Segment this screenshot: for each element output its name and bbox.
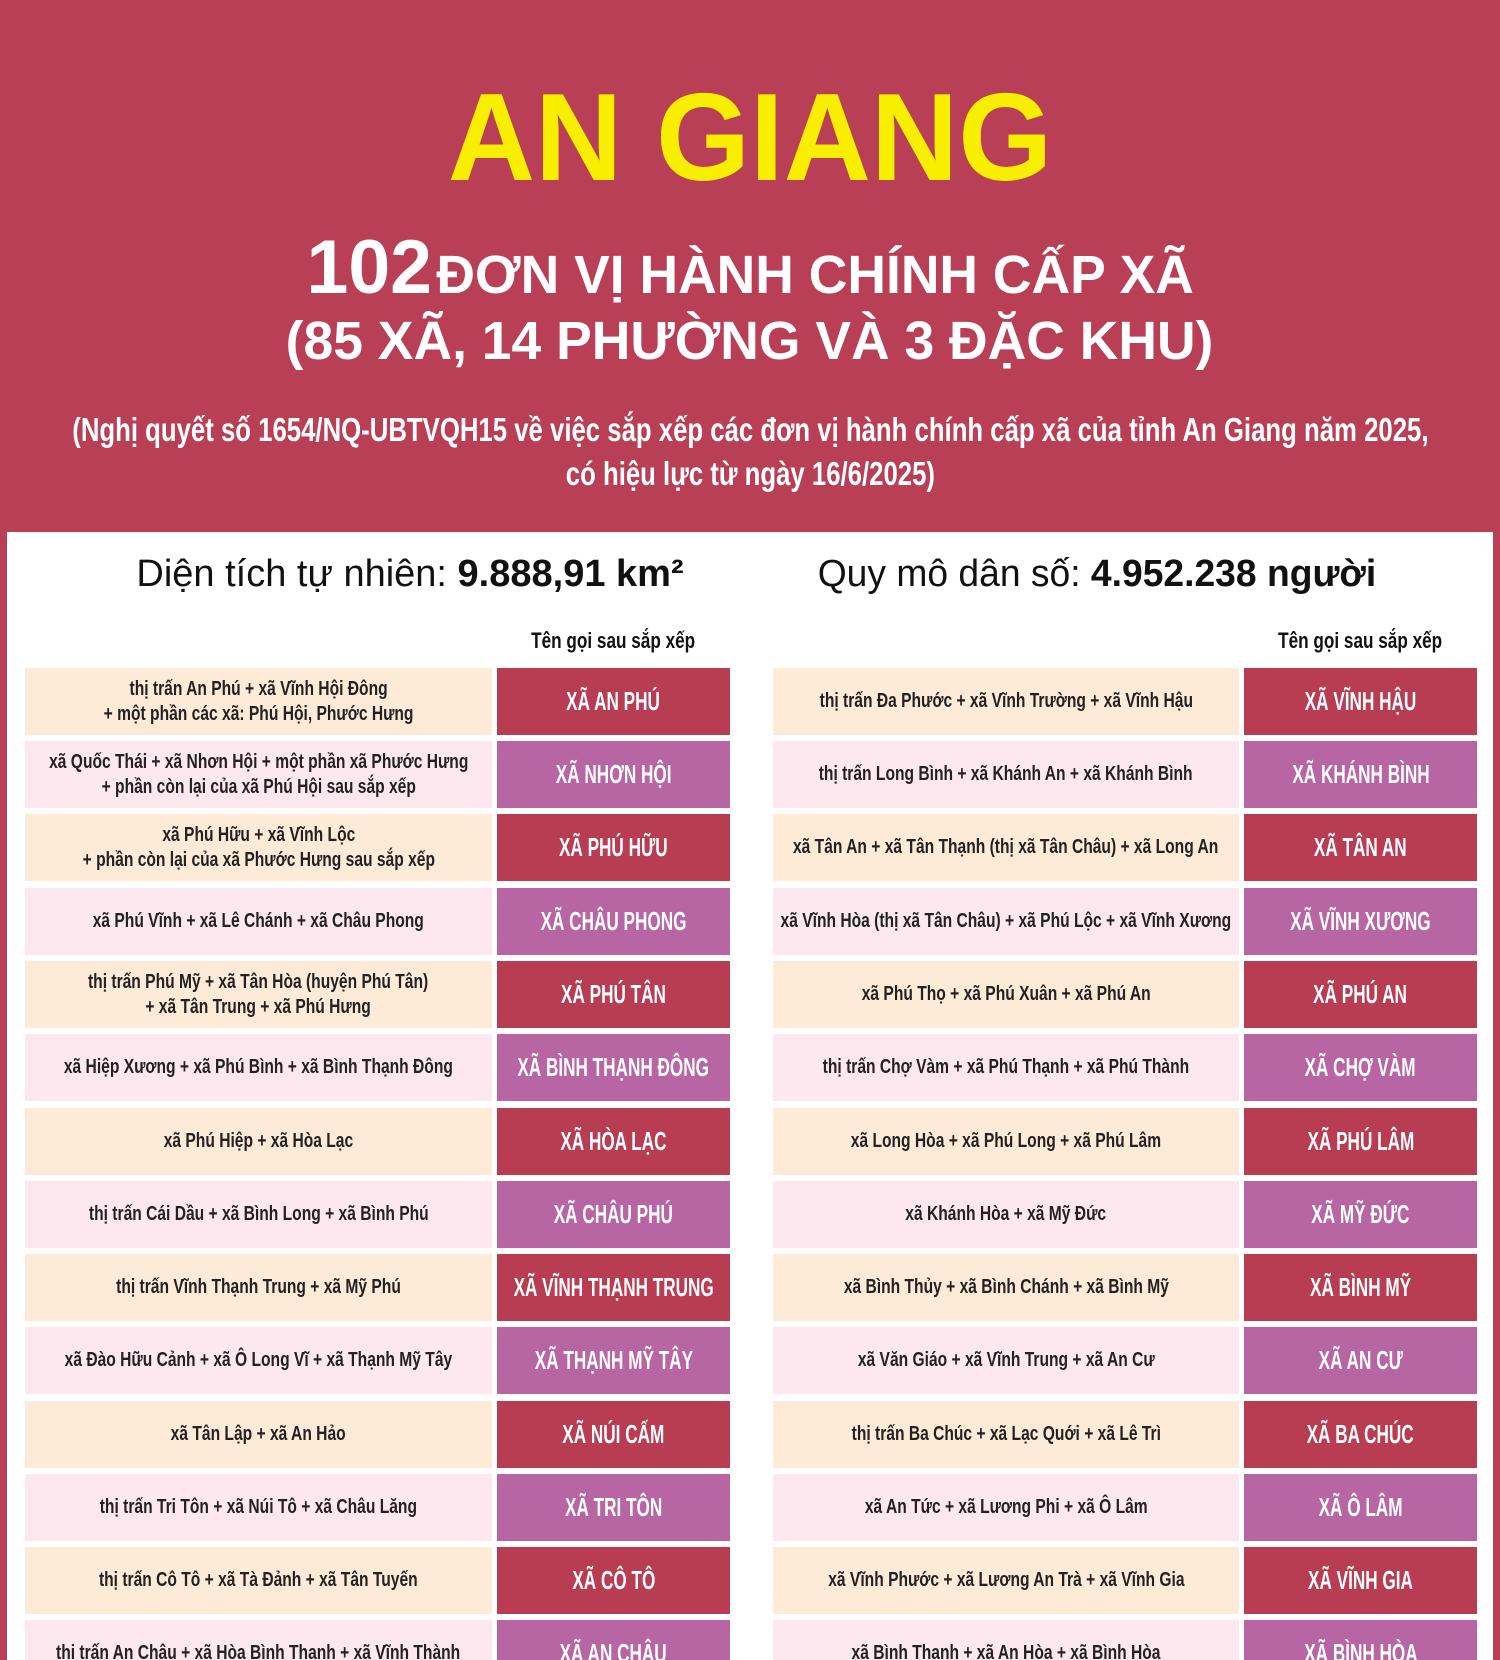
table left: xã Đào Hữu Cảnh + xã Ô Long Vĩ + xã Thạnh Mỹ Tây <box>65 1349 452 1371</box>
table left: + phần còn lại của xã Phước Hưng sau sắp xếp <box>82 848 435 870</box>
table left: XÃ PHÚ HỮU <box>559 832 668 862</box>
table right: XÃ CHỢ VÀM <box>1305 1052 1416 1082</box>
white panel <box>7 532 1493 1660</box>
table right: XÃ AN CƯ <box>1318 1345 1403 1375</box>
table right: xã Long Hòa + xã Phú Long + xã Phú Lâm <box>851 1130 1161 1152</box>
table left: + một phần các xã: Phú Hội, Phước Hưng <box>104 702 413 724</box>
resolution note: có hiệu lực từ ngày 16/6/2025) <box>565 455 935 492</box>
title: AN GIANG <box>448 69 1052 207</box>
subtitle line 1: 102 ĐƠN VỊ HÀNH CHÍNH CẤP XÃ <box>306 225 1194 310</box>
table right: XÃ PHÚ AN <box>1314 979 1407 1009</box>
table left: xã Quốc Thái + xã Nhơn Hội + một phần xã Phước Hưng <box>49 750 468 772</box>
table left: thị trấn Tri Tôn + xã Núi Tô + xã Châu Lăng <box>100 1496 417 1518</box>
table right: thị trấn Ba Chúc + xã Lạc Quới + xã Lê Trì <box>851 1423 1161 1445</box>
resolution note: (Nghị quyết số 1654/NQ-UBTVQH15 về việc sắp xếp các đơn vị hành chính cấp xã của tỉnh An Giang năm 2025, <box>72 411 1428 448</box>
table left: XÃ NÚI CẤM <box>562 1419 665 1449</box>
table left: thị trấn Cái Dầu + xã Bình Long + xã Bình Phú <box>89 1203 428 1225</box>
table right: XÃ MỸ ĐỨC <box>1311 1199 1410 1229</box>
table left: XÃ VĨNH THẠNH TRUNG <box>513 1272 714 1302</box>
subtitle line 2: (85 XÃ, 14 PHƯỜNG VÀ 3 ĐẶC KHU) <box>286 311 1214 371</box>
table right: XÃ VĨNH XƯƠNG <box>1290 906 1431 936</box>
table left: XÃ THẠNH MỸ TÂY <box>534 1345 693 1375</box>
table left: xã Hiệp Xương + xã Phú Bình + xã Bình Thạnh Đông <box>64 1056 453 1078</box>
table left: XÃ PHÚ TÂN <box>561 979 666 1009</box>
table right: xã Văn Giáo + xã Vĩnh Trung + xã An Cư <box>858 1349 1154 1371</box>
table left: xã Phú Hữu + xã Vĩnh Lộc <box>162 824 355 846</box>
table left: thị trấn Cô Tô + xã Tà Đảnh + xã Tân Tuyến <box>99 1569 418 1591</box>
table left: thị trấn Vĩnh Thạnh Trung + xã Mỹ Phú <box>116 1276 401 1298</box>
table right: thị trấn Đa Phước + xã Vĩnh Trường + xã Vĩnh Hậu <box>819 690 1193 712</box>
table left: XÃ HÒA LẠC <box>560 1126 667 1156</box>
column header left: Tên gọi sau sắp xếp <box>531 628 695 653</box>
table left <box>25 668 730 1660</box>
table right: XÃ VĨNH HẬU <box>1305 686 1416 716</box>
table right: xã Khánh Hòa + xã Mỹ Đức <box>906 1203 1106 1225</box>
table right: XÃ VĨNH GIA <box>1308 1565 1413 1595</box>
table right: xã Bình Thủy + xã Bình Chánh + xã Bình Mỹ <box>843 1276 1169 1298</box>
table left: thị trấn Phú Mỹ + xã Tân Hòa (huyện Phú Tân) <box>88 970 429 992</box>
table right: xã Vĩnh Hòa (thị xã Tân Châu) + xã Phú Lộc + xã Vĩnh Xương <box>781 910 1231 932</box>
table left: XÃ AN PHÚ <box>567 686 660 716</box>
table right: XÃ BÌNH MỸ <box>1310 1272 1411 1302</box>
table left: XÃ BÌNH THẠNH ĐÔNG <box>518 1052 709 1082</box>
table left: XÃ CHÂU PHÚ <box>554 1199 673 1229</box>
table left: XÃ CÔ TÔ <box>572 1565 655 1595</box>
resolution note <box>72 411 1428 492</box>
table left: thị trấn An Phú + xã Vĩnh Hội Đông <box>129 678 388 700</box>
table left: xã Tân Lập + xã An Hảo <box>171 1423 346 1445</box>
table left: + xã Tân Trung + xã Phú Hưng <box>146 996 371 1018</box>
table left: XÃ TRI TÔN <box>565 1492 662 1522</box>
table right: xã Phú Thọ + xã Phú Xuân + xã Phú An <box>862 983 1150 1005</box>
table right: XÃ TÂN AN <box>1314 832 1407 862</box>
stat: population: Quy mô dân số: 4.952.238 người <box>818 553 1376 595</box>
table right: XÃ KHÁNH BÌNH <box>1292 759 1429 789</box>
table right <box>773 668 1477 1660</box>
table left: XÃ CHÂU PHONG <box>541 906 686 936</box>
table right: XÃ BA CHÚC <box>1307 1419 1414 1449</box>
table right: thị trấn Long Bình + xã Khánh An + xã Khánh Bình <box>819 763 1193 785</box>
table left: + phần còn lại của xã Phú Hội sau sắp xếp <box>101 776 416 798</box>
table left: XÃ NHƠN HỘI <box>556 759 671 789</box>
table right: XÃ PHÚ LÂM <box>1307 1126 1414 1156</box>
table right: XÃ Ô LÂM <box>1319 1492 1402 1522</box>
table right: xã Vĩnh Phước + xã Lương An Trà + xã Vĩnh Gia <box>828 1569 1184 1591</box>
table right: thị trấn Chợ Vàm + xã Phú Thạnh + xã Phú Thành <box>823 1056 1189 1078</box>
table left: xã Phú Vĩnh + xã Lê Chánh + xã Châu Phong <box>93 910 424 932</box>
table right: xã Tân An + xã Tân Thạnh (thị xã Tân Châu) + xã Long An <box>793 836 1219 858</box>
stat: area: Diện tích tự nhiên: 9.888,91 km² <box>136 553 684 595</box>
table right: xã An Tức + xã Lương Phi + xã Ô Lâm <box>865 1496 1147 1518</box>
table left: xã Phú Hiệp + xã Hòa Lạc <box>164 1130 353 1152</box>
column header right: Tên gọi sau sắp xếp <box>1278 628 1443 653</box>
